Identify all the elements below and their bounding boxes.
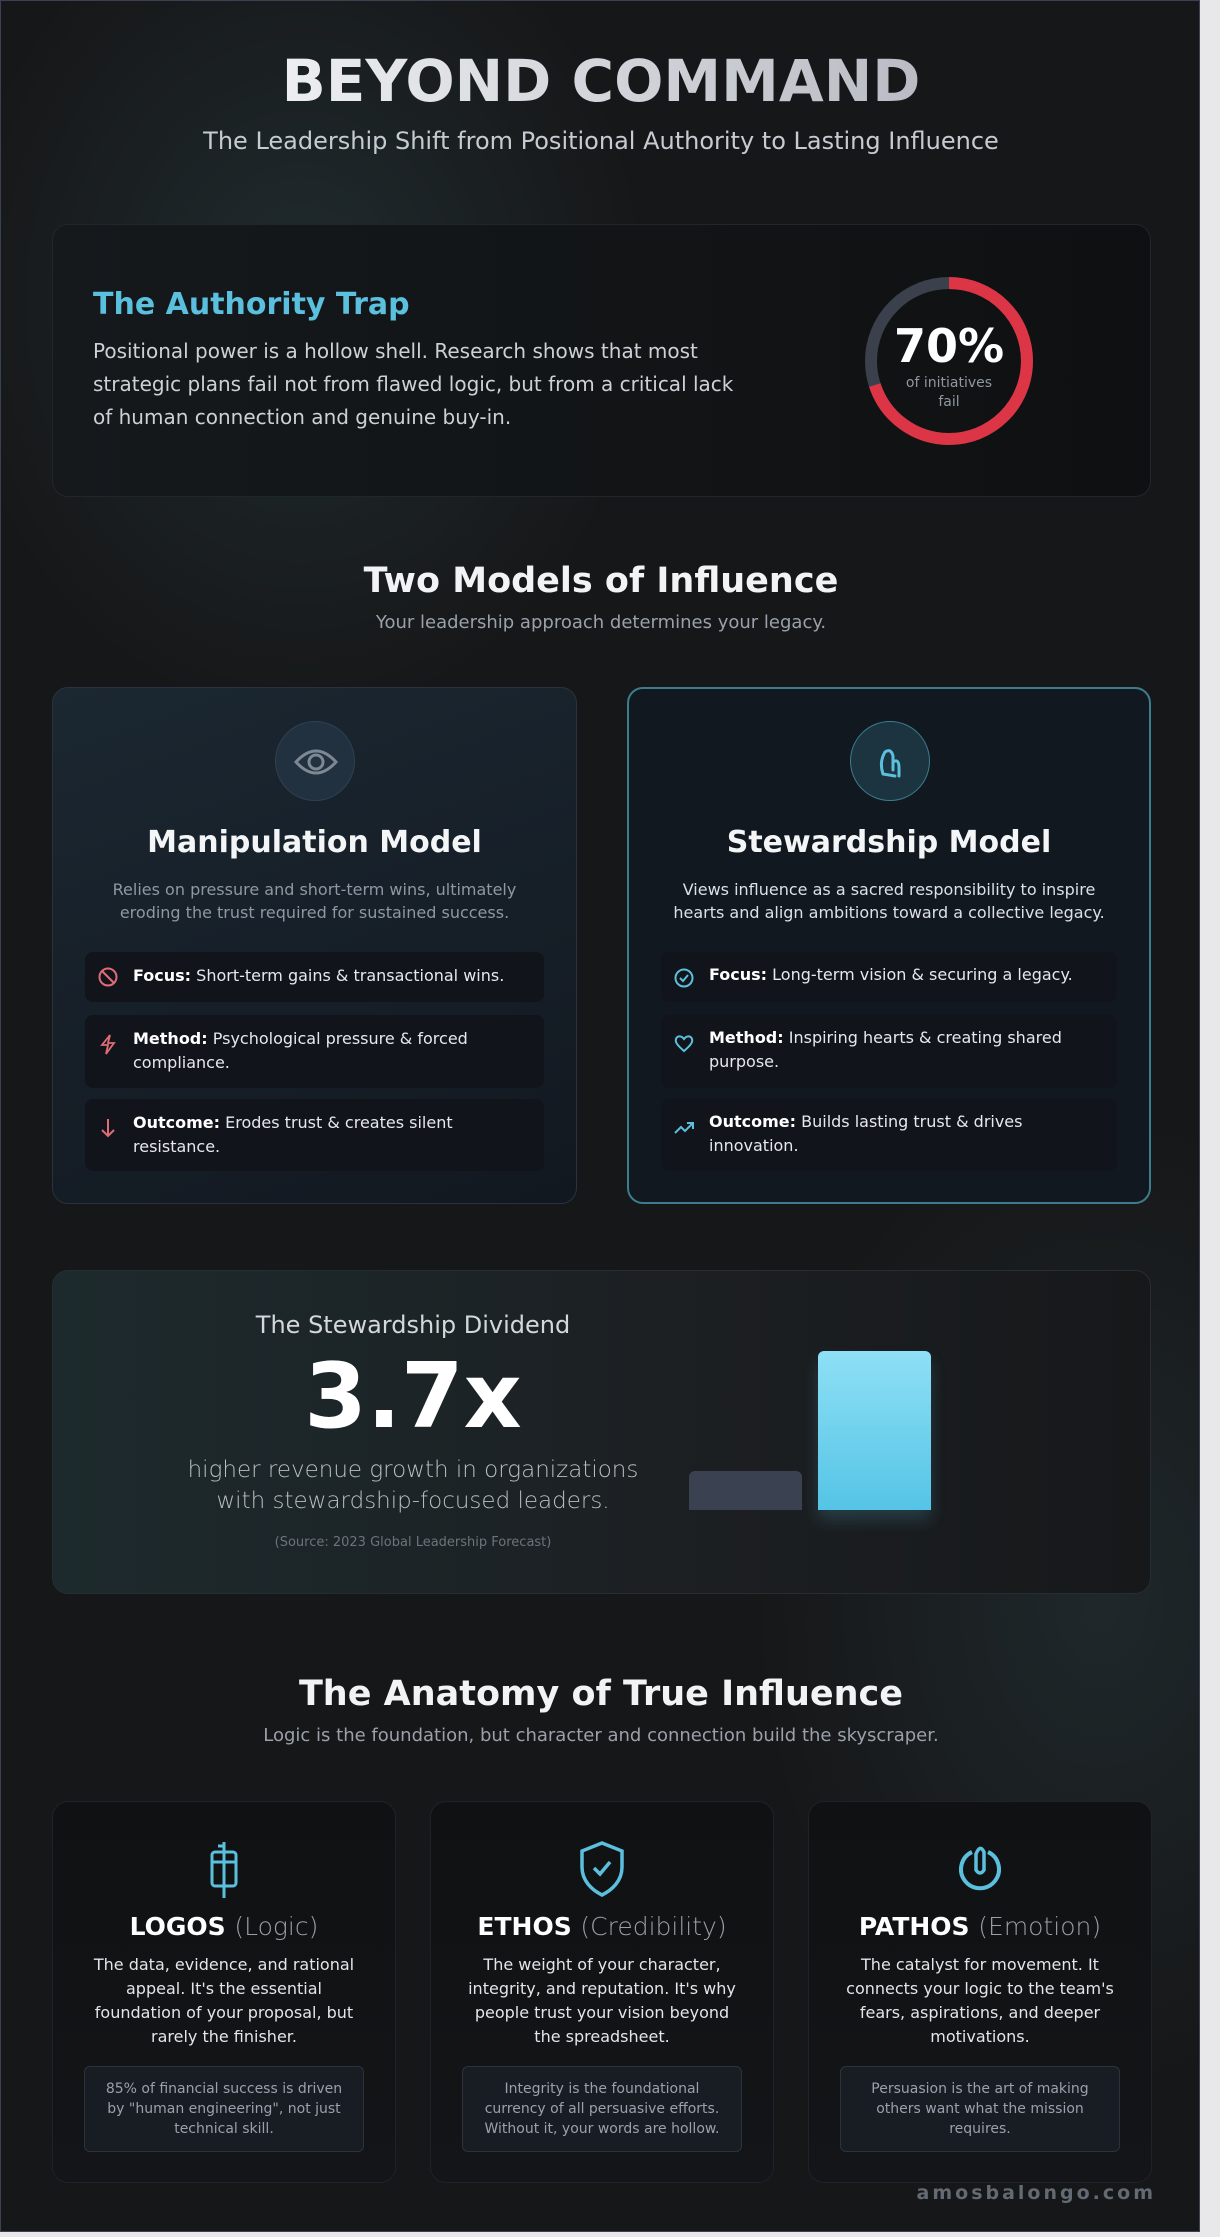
item: focus [85,952,544,1002]
item: method [661,1015,1117,1088]
icon: eye [275,721,355,801]
item: method [85,1015,544,1088]
item: focus: Focus: Long-term vision & securing a legacy. [709,965,1073,984]
text: pathos: The catalyst for movement. It connects your logic to the team's fears, aspirations, and deeper motivations. [846,1955,1114,2046]
panel: stewardship dividend [52,1270,1151,1594]
panel: manipulation model [52,687,577,1204]
heading: manipulation model: Manipulation Model [147,825,482,860]
item: outcome: Outcome: Erodes trust & creates silent resistance. [133,1113,453,1156]
text: revenue growth: higher revenue growth in organizations with stewardship-focused leaders. [188,1457,638,1514]
quote: pathos [840,2066,1120,2152]
footer: site name: amosbalongo.com [917,2182,1156,2204]
item: outcome [661,1099,1117,1171]
quote: pathos: Persuasion is the art of making others want what the mission requires. [871,2081,1089,2137]
heading: logos: LOGOS (Logic) [130,1912,318,1941]
chart: 70% donut: fail [938,394,960,410]
heading: two models: Two Models of Influence [364,561,838,601]
chart: 70% donut: of initiatives [906,375,992,391]
chart: 70% donut [865,277,1033,445]
subtitle: anatomy: Logic is the foundation, but character and connection build the skyscraper. [263,1725,939,1746]
item: method: Method: Psychological pressure & forced compliance. [133,1029,468,1072]
icon: hand [850,721,930,801]
heading: authority trap: The Authority Trap [93,287,410,322]
title: BEYOND COMMAND [282,47,920,115]
icon: pathos [958,1846,1002,1890]
heading: pathos: PATHOS (Emotion) [859,1912,1101,1941]
stat: 3.7x: 3.7x [304,1344,522,1449]
chart: 70% donut: 70% [894,319,1004,373]
heading: dividend: The Stewardship Dividend [256,1311,570,1339]
item: focus: Focus: Short-term gains & transactional wins. [133,966,504,985]
text: stewardship description: Views influence as a sacred responsibility to inspire hearts and align ambitions toward a collective legacy. [673,880,1105,922]
panel: ethos [430,1801,774,2183]
text: authority trap body: Positional power is a hollow shell. Research shows that most strategic plans fail not from flawed logic, but from a critical lack of human connection and genuine buy-in. [93,339,733,429]
quote: ethos [462,2066,742,2152]
text: logos: The data, evidence, and rational appeal. It's the essential foundation of your proposal, but rarely the finisher. [94,1955,354,2046]
text: ethos: The weight of your character, integrity, and reputation. It's why people trust your vision beyond the spreadsheet. [468,1955,736,2046]
panel: stewardship model [627,687,1151,1204]
quote: logos: 85% of financial success is driven by "human engineering", not just technical skill. [106,2081,342,2137]
subtitle: The Leadership Shift from Positional Authority to Lasting Influence [203,127,999,155]
chart: bar comparison [689,1351,936,1526]
heading: ethos: ETHOS (Credibility) [477,1912,727,1941]
item: method: Method: Inspiring hearts & creating shared purpose. [709,1028,1062,1071]
icon: shield [580,1841,624,1897]
text: manipulation description: Relies on pressure and short-term wins, ultimately eroding the trust required for sustained success. [113,880,516,922]
heading: stewardship model: Stewardship Model [727,825,1051,860]
panel: logos [52,1801,396,2183]
heading: anatomy: The Anatomy of True Influence [299,1674,903,1714]
item: outcome [85,1099,544,1171]
quote: logos [84,2066,364,2152]
text: source: (Source: 2023 Global Leadership Forecast) [275,1535,551,1550]
item: outcome: Outcome: Builds lasting trust & drives innovation. [709,1112,1022,1155]
item: focus [661,952,1117,1002]
panel: pathos [808,1801,1152,2183]
quote: ethos: Integrity is the foundational currency of all persuasive efforts. Without it, your words are hollow. [484,2081,720,2137]
icon: logos [210,1842,238,1898]
panel: authority trap [52,224,1151,497]
subtitle: two models: Your leadership approach determines your legacy. [376,612,826,633]
